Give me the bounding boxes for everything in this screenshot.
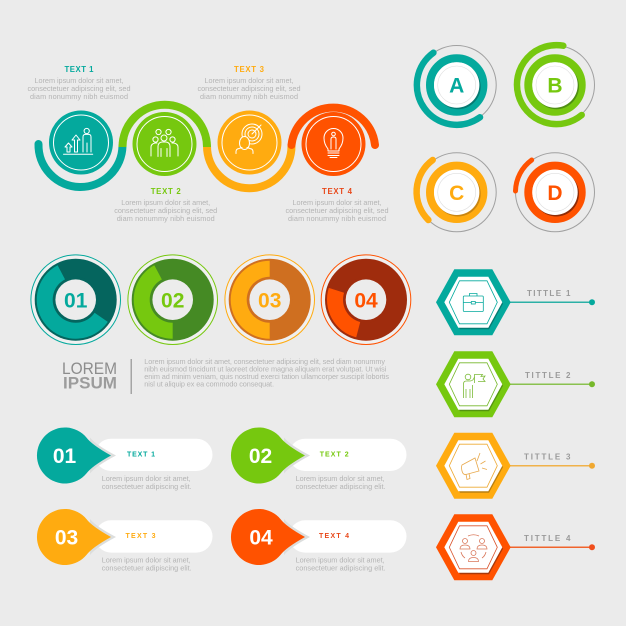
pill 02: 02 [249, 445, 272, 468]
pill 04: consectetuer adipiscing elit. [296, 564, 386, 572]
badge C [417, 153, 496, 232]
heading: text 3 block: diam nonummy nibh euismod [200, 92, 298, 101]
pill 03: consectetuer adipiscing elit. [102, 564, 192, 572]
heading: text 2 block: TEXT 2 [151, 187, 181, 196]
panel: hexagon titles [436, 269, 595, 580]
wave line: teal segment [38, 144, 122, 187]
wave line: red segment [292, 108, 375, 145]
heading: text 4 block: diam nonummy nibh euismod [288, 214, 386, 223]
pill 02: TEXT 2 [320, 452, 349, 458]
heading: text 3 block: Lorem ipsum dolor sit amet, [204, 76, 294, 85]
heading: text 2 block: Lorem ipsum dolor sit amet, [121, 198, 210, 207]
pill 03: TEXT 3 [126, 533, 156, 540]
heading: text 1 block: diam nonummy nibh euismod [30, 92, 128, 101]
paragraph: nibh euismod tincidunt ut laoreet dolore magna aliquam erat volutpat. Ut wisi [144, 365, 387, 374]
step 2 circle with team icon [132, 112, 196, 176]
pill 01: Lorem ipsum dolor sit amet, [102, 474, 191, 483]
vertical bar [130, 359, 132, 394]
donut 04 [321, 255, 411, 344]
pill 04: 04 [249, 526, 273, 550]
heading: text 1 block: consectetuer adipiscing elit, sed [28, 84, 130, 93]
hexagon item 3 [436, 433, 595, 499]
badge D [516, 153, 594, 232]
badge D: D [547, 182, 563, 205]
paragraph: nisl ut aliquip ex ea commodo consequat. [144, 380, 274, 388]
icon: briefcase [463, 294, 483, 312]
pill 02: Lorem ipsum dolor sit amet, [296, 474, 385, 483]
heading: text 4 block [286, 187, 388, 223]
pill 04: Lorem ipsum dolor sit amet, [296, 556, 385, 564]
pill 03: 03 [55, 526, 78, 550]
icon: megaphone [462, 453, 487, 480]
badge A [417, 46, 496, 125]
heading: text 2 block [114, 187, 217, 223]
donut 04: 04 [354, 289, 378, 312]
panel: numbered pills [37, 428, 407, 572]
panel: letter badges [417, 45, 594, 232]
heading: text 2 block: consectetuer adipiscing elit, sed [114, 206, 217, 215]
pill 03 [37, 509, 213, 572]
heading: text 3 block: TEXT 3 [234, 65, 265, 74]
donut 01: 01 [64, 289, 88, 312]
heading: text 4 block: consectetuer adipiscing elit, sed [286, 206, 388, 215]
step 4 circle with light bulb icon [302, 112, 366, 176]
pill 01: TEXT 1 [127, 452, 155, 458]
paragraph: Lorem ipsum dolor sit amet, consectetuer adipiscing elit, sed diam nonummy [144, 357, 385, 366]
pill 04 [231, 509, 406, 572]
hexagon item 1 [436, 269, 595, 335]
heading: text 1 block: TEXT 1 [64, 65, 94, 74]
donut 01 [31, 255, 121, 344]
panel: numbered donuts [31, 255, 411, 344]
donut 02: 02 [161, 289, 184, 312]
pill 04: TEXT 4 [319, 533, 349, 540]
wave line: green segment [122, 105, 207, 147]
badge B [516, 45, 594, 124]
icon: person with flag [464, 374, 485, 398]
heading: text 4 block: Lorem ipsum dolor sit amet, [292, 198, 382, 207]
panel: lorem ipsum text [62, 357, 389, 394]
heading: text 1 block [28, 65, 130, 101]
pill 03: Lorem ipsum dolor sit amet, [102, 556, 191, 564]
badge C: C [449, 182, 464, 205]
hexagon item 4: TITTLE 4 [524, 534, 571, 543]
donut 02 [128, 255, 218, 344]
heading: text 2 block: diam nonummy nibh euismod [117, 214, 215, 223]
icon: people circle [460, 535, 487, 562]
hexagon item 3: TITTLE 3 [524, 452, 571, 462]
badge A: A [449, 74, 464, 98]
hexagon item 2: TITTLE 2 [525, 371, 571, 380]
heading: text 3 block: consectetuer adipiscing elit, sed [198, 84, 300, 93]
hexagon item 2 [436, 351, 595, 417]
pill 01: 01 [53, 445, 76, 468]
pill 01 [37, 428, 213, 491]
donut 03: 03 [258, 289, 281, 312]
hexagon item 1: TITTLE 1 [527, 289, 571, 298]
heading: lorem ipsum: LOREM [62, 359, 117, 378]
paragraph [144, 357, 389, 388]
donut 03 [225, 255, 314, 344]
step 3 circle with target icon [218, 110, 282, 174]
heading: text 3 block [198, 65, 300, 101]
heading: text 1 block: Lorem ipsum dolor sit amet, [34, 76, 124, 85]
heading: text 4 block: TEXT 4 [322, 187, 353, 196]
heading: lorem ipsum: IPSUM [63, 373, 117, 392]
pill 02 [231, 428, 406, 491]
pill 01: consectetuer adipiscing elit. [102, 482, 192, 491]
step 1 circle with growth icon [49, 110, 113, 174]
panel: wave timeline [28, 65, 388, 223]
hexagon item 4 [436, 514, 595, 580]
badge B: B [547, 74, 563, 98]
paragraph: enim ad minim veniam, quis nostrud exerci tation ullamcorper suscipit lobortis [144, 372, 389, 381]
pill 02: consectetuer adipiscing elit. [296, 482, 386, 491]
heading: lorem ipsum [62, 359, 117, 392]
wave line: orange segment [207, 146, 292, 188]
